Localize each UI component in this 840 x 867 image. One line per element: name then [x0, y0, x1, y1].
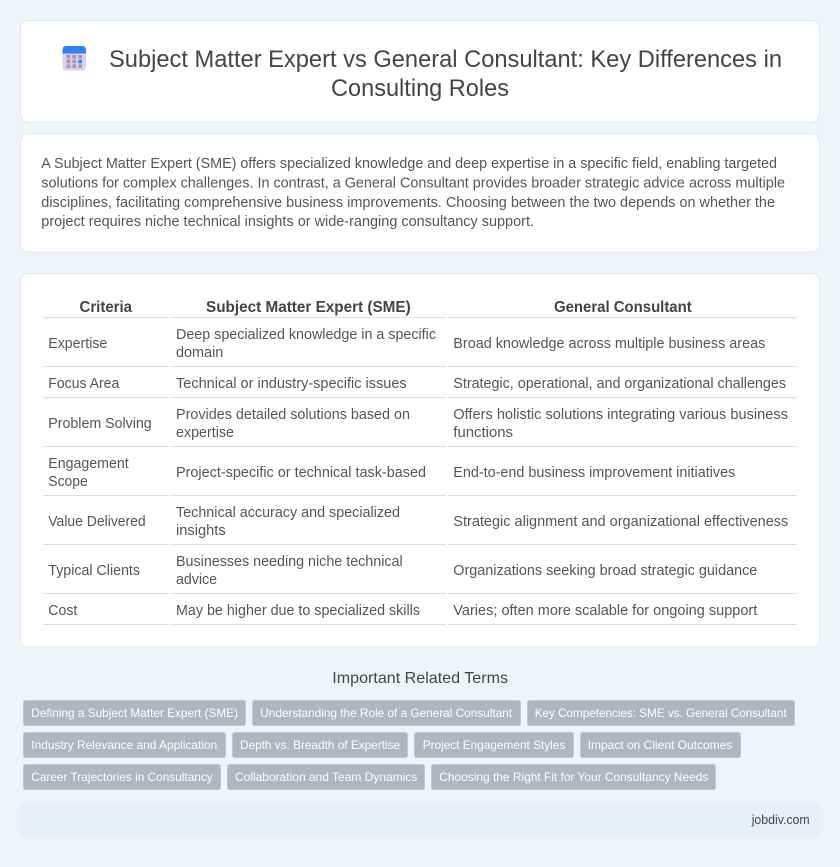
table header: Subject Matter Expert (SME)	[206, 299, 411, 316]
table row: Typical Clients: Typical Clients	[48, 563, 140, 579]
table row: Expertise: Expertise	[48, 336, 107, 352]
table row: Problem Solving: Problem Solving	[48, 416, 152, 432]
table row: Expertise: domain	[176, 345, 223, 361]
table header	[43, 299, 797, 318]
table row: Focus Area: Strategic, operational, and organizational challenges	[453, 376, 786, 392]
table row: Value Delivered: Technical accuracy and specialized	[176, 505, 400, 521]
table row: Typical Clients: Organizations seeking broad strategic guidance	[453, 563, 757, 579]
icon: calendar	[62, 46, 86, 70]
tag: Understanding the Role of a General Consultant	[260, 706, 513, 720]
title: Consulting Roles	[331, 75, 509, 102]
table row: Typical Clients: Businesses needing niche technical	[176, 554, 403, 570]
table row: Problem Solving: expertise	[176, 425, 234, 441]
heading: important related terms: Important Related Terms	[332, 670, 508, 687]
table row: Value Delivered: insights	[176, 523, 226, 539]
tag: Project Engagement Styles	[423, 738, 565, 752]
tag: Collaboration and Team Dynamics	[235, 770, 417, 784]
table row: Focus Area	[43, 376, 797, 398]
tag	[24, 732, 226, 758]
table row: Focus Area: Technical or industry-specific issues	[176, 376, 407, 392]
text block: introduction paragraph	[41, 156, 785, 230]
table row: Engagement Scope: Scope	[48, 474, 88, 490]
table row: Problem Solving	[43, 407, 797, 447]
table row: Cost: May be higher due to specialized skills	[176, 603, 420, 619]
table row: Expertise: Broad knowledge across multiple business areas	[453, 336, 765, 352]
text block: introduction paragraph: solutions for complex challenges. In contrast, a General Consultant provides broader strategic advice across multiple	[41, 176, 785, 192]
title	[109, 46, 782, 102]
table header: General Consultant	[554, 299, 692, 316]
tag	[252, 700, 520, 726]
text block: introduction paragraph: A Subject Matter Expert (SME) offers specialized knowledge and deep expertise in a specific field, enabling targeted	[41, 156, 777, 172]
tag group: related terms	[24, 700, 794, 790]
tag: Industry Relevance and Application	[31, 738, 217, 752]
table row: Cost: Varies; often more scalable for ongoing support	[453, 603, 757, 619]
tag: Key Competencies: SME vs. General Consultant	[535, 706, 787, 720]
tag	[528, 700, 794, 726]
panel: introduction	[20, 134, 820, 252]
table row: Cost: Cost	[48, 603, 77, 619]
table header: Criteria	[80, 299, 132, 316]
tag: Defining a Subject Matter Expert (SME)	[31, 706, 238, 720]
panel: title card	[20, 20, 820, 122]
tag	[414, 732, 574, 758]
footer: jobdiv.com	[751, 813, 810, 827]
table row: Typical Clients	[43, 554, 797, 594]
table row: Typical Clients: advice	[176, 572, 217, 588]
tag	[24, 764, 220, 790]
table row: Value Delivered: Strategic alignment and organizational effectiveness	[453, 514, 788, 530]
table row: Engagement Scope: Project-specific or technical task-based	[176, 465, 426, 481]
text block: introduction paragraph: disciplines, facilitating comprehensive business improvements. Choosing between the two depends on whether the	[41, 195, 775, 211]
table row: Problem Solving: Offers holistic solutions integrating various business	[453, 407, 788, 423]
tag: Depth vs. Breadth of Expertise	[240, 738, 400, 752]
table row: Problem Solving: functions	[453, 425, 513, 441]
tag: Career Trajectories in Consultancy	[31, 770, 213, 784]
table row: Expertise: Deep specialized knowledge in a specific	[176, 327, 436, 343]
table row: Cost	[43, 603, 797, 625]
tag	[580, 732, 740, 758]
table row: Engagement Scope	[43, 456, 797, 496]
table row: Value Delivered	[43, 505, 797, 545]
tag	[24, 700, 246, 726]
tag	[228, 764, 424, 790]
title: Subject Matter Expert vs General Consultant: Key Differences in	[109, 46, 782, 73]
tag	[232, 732, 408, 758]
table row: Problem Solving: Provides detailed solutions based on	[176, 407, 410, 423]
tag	[432, 764, 716, 790]
table row: Value Delivered: Value Delivered	[48, 514, 146, 530]
panel: comparison table	[20, 274, 820, 647]
tag: Impact on Client Outcomes	[588, 738, 732, 752]
table row: Engagement Scope: End-to-end business improvement initiatives	[453, 465, 735, 481]
footer	[20, 803, 820, 837]
table row: Engagement Scope: Engagement	[48, 456, 129, 472]
tag: Choosing the Right Fit for Your Consultancy Needs	[439, 770, 708, 784]
table row: Focus Area: Focus Area	[48, 376, 119, 392]
text block: introduction paragraph: project requires niche technical insights or wide-ranging consultancy support.	[41, 214, 534, 230]
table row: Expertise	[43, 327, 797, 367]
